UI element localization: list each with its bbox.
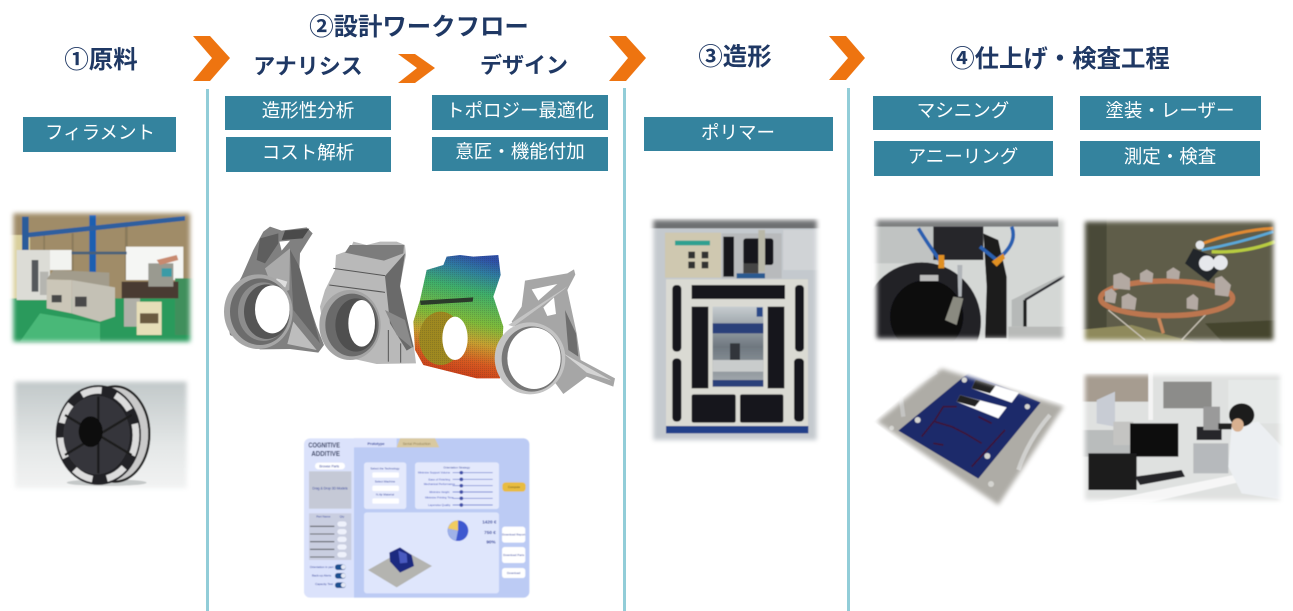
label box: polymer: ポリマー xyxy=(701,122,775,143)
dashboard download buttons xyxy=(502,527,525,578)
screenshot: Cognitive Additive dashboard: Select Machine xyxy=(375,480,396,484)
screenshot: Cognitive Additive dashboard: Minimize Height xyxy=(429,490,450,494)
label box: measurement and inspection: 測定・検査 xyxy=(1124,146,1216,167)
model: design space block xyxy=(319,242,416,364)
screenshot: Cognitive Additive dashboard: Download Parts xyxy=(503,553,525,557)
label box: cost analysis xyxy=(226,137,391,172)
label box: filament xyxy=(23,117,176,152)
heading: design workflow: ②設計ワークフロー xyxy=(309,14,529,41)
label box: styling and function xyxy=(432,137,608,171)
dashboard cost figures: 1420 € xyxy=(482,520,497,525)
label box: printability analysis: 造形性分析 xyxy=(262,100,354,121)
label box: machining xyxy=(873,96,1053,130)
photo: filament production line xyxy=(7,207,197,347)
label box: annealing: アニーリング xyxy=(908,146,1018,167)
screenshot: Cognitive Additive dashboard: Select the Technology xyxy=(370,467,400,471)
dashboard cost figures xyxy=(482,520,497,545)
label box: topology optimization xyxy=(432,95,608,130)
subheading: analysis: アナリシス xyxy=(253,54,363,79)
dashboard tabs: Prototype xyxy=(367,442,385,446)
screenshot: Cognitive Additive dashboard: Browse Parts xyxy=(319,464,340,468)
screenshot: Cognitive Additive dashboard xyxy=(304,438,529,598)
screenshot: Cognitive Additive dashboard: Drag & Drop 3D Models xyxy=(312,486,348,490)
screenshot: Cognitive Additive dashboard: Capacity Test xyxy=(315,582,333,586)
photo: coating robot and copper ring xyxy=(1078,215,1282,348)
dashboard tabs xyxy=(367,442,431,446)
screenshot: Cognitive Additive dashboard: Qty xyxy=(340,515,345,519)
panel: 1 raw material xyxy=(7,47,197,492)
subheading: design: デザイン xyxy=(480,53,568,78)
model: stress analysis heat map xyxy=(413,255,503,378)
arrow: raw material to design xyxy=(193,36,230,81)
label box: annealing xyxy=(874,141,1053,176)
label box: topology optimization: トポロジー最適化 xyxy=(446,100,594,121)
screenshot: Cognitive Additive dashboard: Minimize Printing Time xyxy=(425,495,454,499)
column divider lines xyxy=(206,88,850,611)
panel: 2 design workflow xyxy=(224,14,615,598)
dashboard cost figures: 750 € xyxy=(484,530,496,535)
dashboard 3D preview xyxy=(368,547,432,587)
photo: polymer 3D printer xyxy=(648,215,822,445)
screenshot: Cognitive Additive dashboard: Download Report xyxy=(502,533,525,537)
arrow: forming to finishing xyxy=(829,36,865,80)
dashboard logo: ADDITIVE xyxy=(311,449,340,458)
screenshot: Cognitive Additive dashboard: Download xyxy=(507,571,521,575)
arrow: analysis to design xyxy=(398,54,435,83)
photo: filament spool xyxy=(10,377,192,492)
dashboard logo: COGNITIVE xyxy=(308,440,340,449)
screenshot: Cognitive Additive dashboard: Mechanical Performance xyxy=(424,482,455,486)
dashboard tabs: Serial Production xyxy=(403,442,431,446)
panel: 4 finishing and inspection xyxy=(862,46,1288,513)
arrow: design to forming xyxy=(609,36,646,81)
dashboard compute button xyxy=(502,482,526,492)
heading: finishing and inspection: ④仕上げ・検査工程 xyxy=(950,46,1170,73)
panel: 3 forming xyxy=(644,44,833,445)
screenshot: Cognitive Additive dashboard: Ease of Finishing xyxy=(428,477,451,481)
screenshot: Cognitive Additive dashboard: Minimize Support Volume xyxy=(418,471,450,475)
heading: raw material: ①原料 xyxy=(64,47,138,74)
label box: machining: マシニング xyxy=(917,100,1009,121)
dashboard logo xyxy=(308,440,340,458)
screenshot: Cognitive Additive dashboard: N.Ajr Material xyxy=(376,492,394,496)
model: original bracket xyxy=(224,227,324,353)
label box: printability analysis xyxy=(225,96,391,130)
label box: measurement and inspection xyxy=(1080,141,1260,176)
heading: forming: ③造形 xyxy=(698,44,772,71)
screenshot: Cognitive Additive dashboard: Orientation Strategy xyxy=(443,465,470,469)
photo: microscope inspection lab xyxy=(1082,373,1282,502)
label box: cost analysis: コスト解析 xyxy=(262,142,354,163)
photo: machining center xyxy=(872,217,1066,342)
illustration: four CAD bracket models xyxy=(224,227,615,394)
label box: styling and function: 意匠・機能付加 xyxy=(455,141,585,162)
label box: coating and laser xyxy=(1080,96,1261,130)
dashboard compute button: Compute xyxy=(508,485,520,489)
screenshot: Cognitive Additive dashboard: Part Name xyxy=(316,515,331,519)
label box: coating and laser: 塗装・レーザー xyxy=(1105,100,1235,121)
screenshot: Cognitive Additive dashboard: Orientation in part xyxy=(310,565,334,569)
dashboard cost figures: 90% xyxy=(486,540,497,545)
model: optimized bracket xyxy=(495,269,615,394)
photo: annealing jig plate xyxy=(876,366,1065,506)
dashboard pie chart xyxy=(448,520,468,541)
screenshot: Cognitive Additive dashboard: Back-up Alerts xyxy=(312,574,332,578)
screenshot: Cognitive Additive dashboard: Layerwise Quality xyxy=(428,503,451,507)
label box: polymer xyxy=(644,117,833,151)
label box: filament: フィラメント xyxy=(45,122,155,143)
